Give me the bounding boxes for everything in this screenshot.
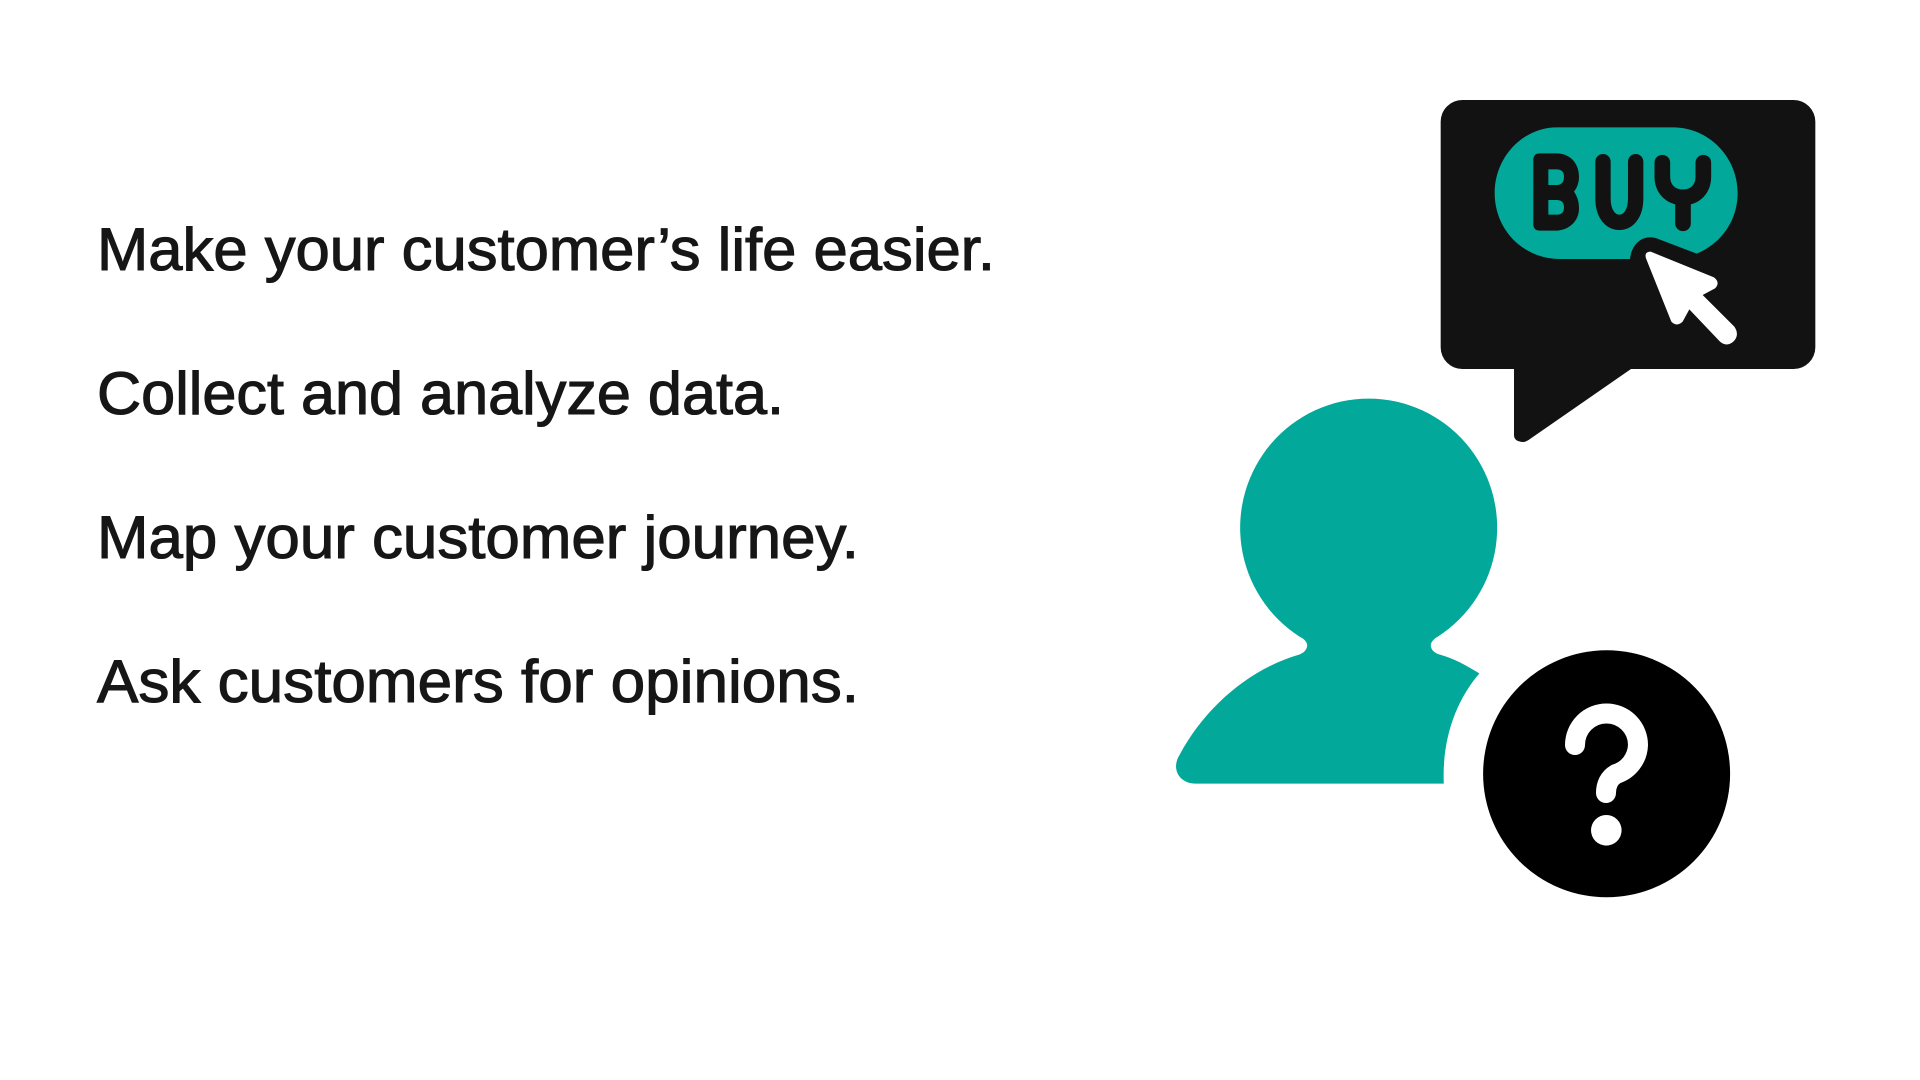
badge circle [1483,650,1730,897]
buy button [1495,127,1738,259]
icon: speech bubble with buy button [1400,69,1815,442]
question mark dot [1591,815,1622,846]
text line: make life easier: Make your customer’s life easier. [97,216,995,283]
text line: ask opinions: Ask customers for opinions. [97,648,859,715]
icon: question mark badge [1483,650,1730,897]
text line: collect data: Collect and analyze data. [97,360,784,427]
speech bubble [1441,100,1815,442]
icon: customer silhouette [1176,399,1497,784]
text block: customer tips [97,216,995,715]
icon: mouse cursor [1646,252,1737,344]
question mark hook [1575,714,1638,793]
text line: map journey: Map your customer journey. [97,504,859,571]
button label letters [1400,69,1703,231]
